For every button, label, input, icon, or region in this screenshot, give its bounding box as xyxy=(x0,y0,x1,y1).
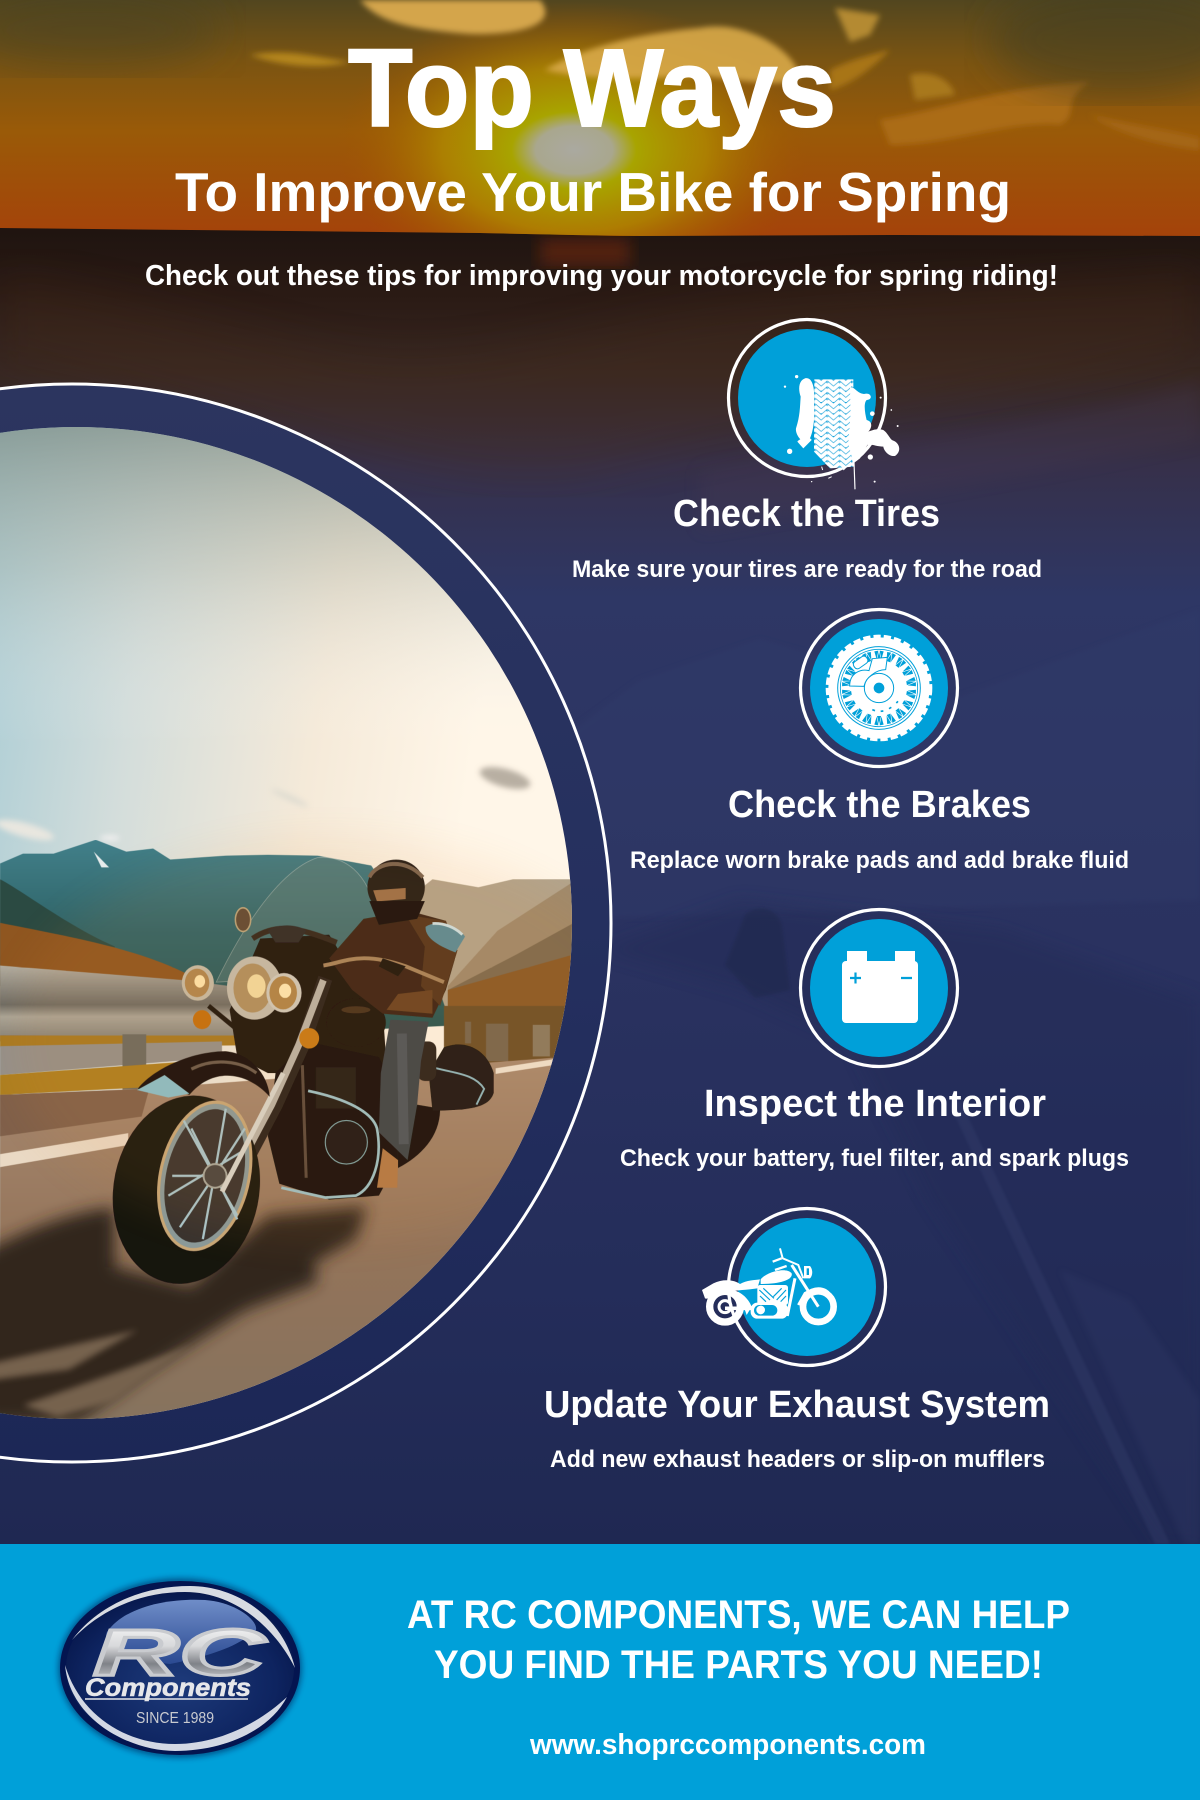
icon: motorcycle xyxy=(702,1208,886,1366)
front fender xyxy=(138,1051,270,1097)
tip 3 description: Check your battery, fuel filter, and spark plugs xyxy=(620,1145,1129,1172)
heading: Update Your Exhaust System xyxy=(544,1384,1050,1426)
helmet xyxy=(367,860,426,902)
call to action xyxy=(407,1593,1070,1687)
call to action: AT RC COMPONENTS, WE CAN HELP xyxy=(407,1593,1070,1637)
logo: RC Components: Components xyxy=(85,1674,251,1702)
tip 4: update your exhaust system xyxy=(544,1208,1050,1426)
tip 4 description: Add new exhaust headers or slip-on mufflers xyxy=(550,1446,1045,1473)
tip 1: check the tires xyxy=(673,320,940,535)
tip 1 description: Make sure your tires are ready for the road xyxy=(572,556,1042,583)
tank xyxy=(383,1014,386,1030)
engine xyxy=(268,1041,398,1200)
rider xyxy=(329,911,457,1018)
warm sun tint xyxy=(24,838,572,1239)
website url: www.shoprccomponents.com xyxy=(529,1729,926,1761)
intro text: Check out these tips for improving your motorcycle for spring riding! xyxy=(145,260,1058,292)
tip 2 description: Replace worn brake pads and add brake fluid xyxy=(630,847,1129,874)
icon: wheel and brake disc xyxy=(800,610,958,766)
tip 3: inspect the interior xyxy=(704,910,1046,1125)
photo circle frame xyxy=(0,384,611,1462)
front fork xyxy=(254,976,332,1156)
far mountains xyxy=(420,879,570,1006)
background: sunset over hills and road xyxy=(0,0,1200,1116)
subtitle: To Improve Your Bike for Spring xyxy=(175,161,1011,223)
road shadow xyxy=(0,1206,367,1425)
icon: tire tracks xyxy=(728,320,899,489)
heading: Inspect the Interior xyxy=(704,1083,1046,1125)
title: Top Ways xyxy=(348,27,836,150)
call to action: YOU FIND THE PARTS YOU NEED! xyxy=(434,1643,1043,1687)
guard rail xyxy=(0,966,245,1037)
headlights xyxy=(227,956,282,1020)
heading: Check the Brakes xyxy=(728,784,1031,826)
windshield xyxy=(216,856,376,983)
heading: Check the Tires xyxy=(673,493,940,535)
front wheel xyxy=(112,1095,260,1284)
tip 2: check the brakes xyxy=(728,610,1031,826)
dark bike body behind the lights xyxy=(230,935,387,1073)
logo: RC Components xyxy=(58,1578,302,1758)
logo: RC Components: RC xyxy=(93,1615,267,1689)
icon: battery xyxy=(800,910,958,1066)
logo: RC Components: SINCE 1989 xyxy=(136,1710,214,1727)
handlebar and mirror xyxy=(323,958,444,982)
photo: motorcycle rider on mountain road xyxy=(0,427,572,1419)
footer banner xyxy=(0,1544,1200,1800)
road xyxy=(0,1058,554,1419)
rear saddlebag and wheel xyxy=(398,1105,440,1168)
